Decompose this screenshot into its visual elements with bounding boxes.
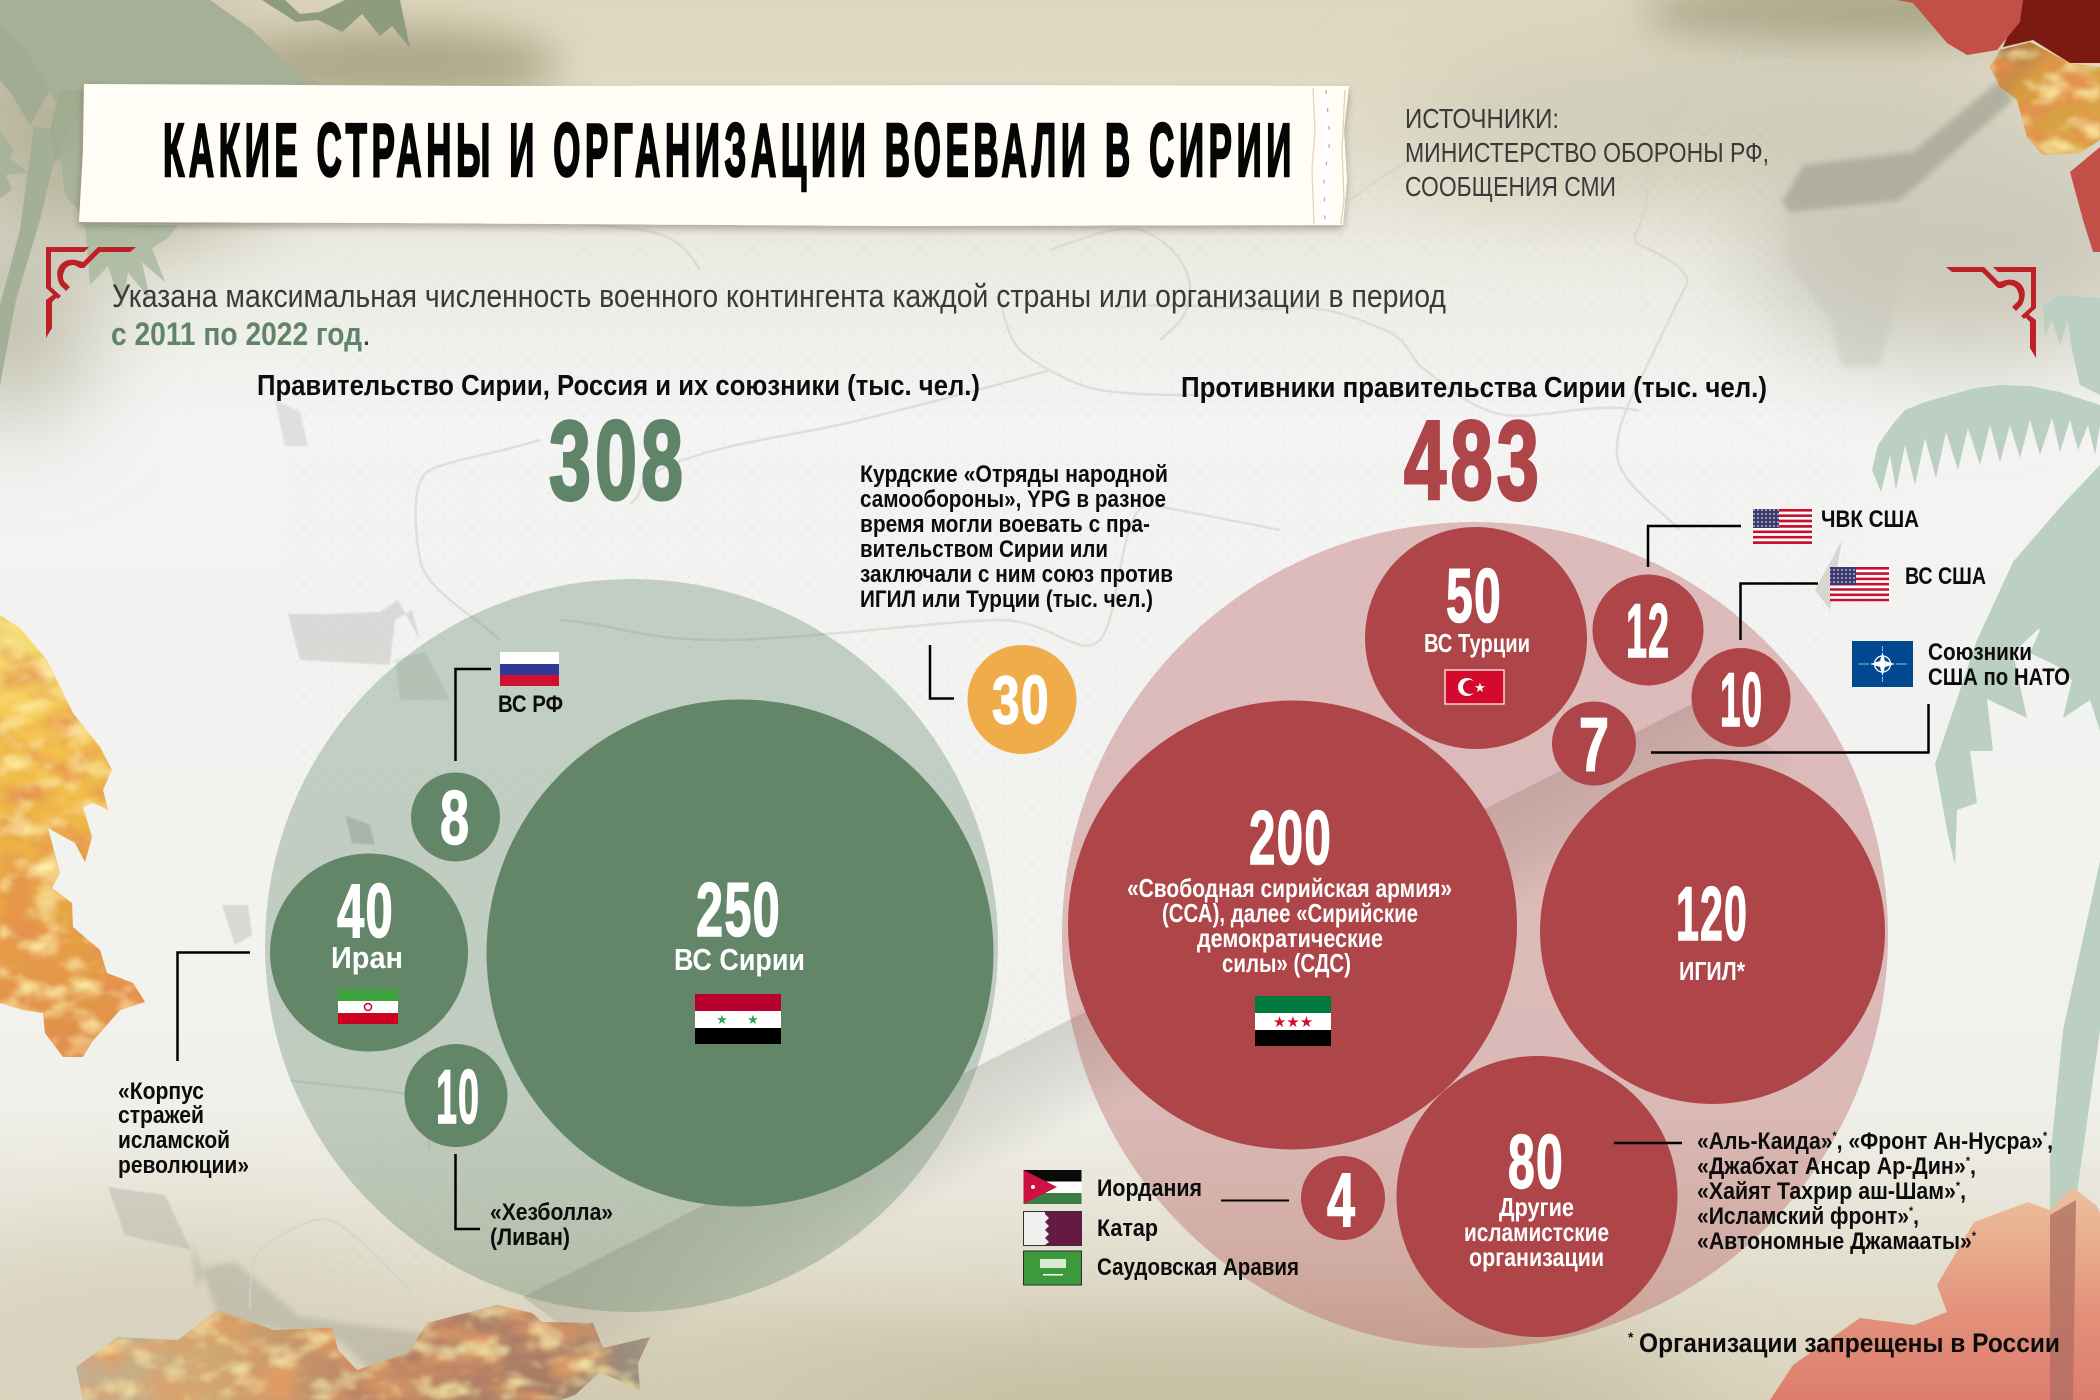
heading: government side: Правительство Сирии, Россия и их союзники (тыс. чел.): [257, 370, 980, 402]
bubble: Russia 8: [411, 772, 500, 862]
legend: Jordan, Qatar, Saudi Arabia: Катар: [1097, 1215, 1158, 1242]
bubble: Turkey 50: [1365, 527, 1587, 749]
sources: МИНИСТЕРСТВО ОБОРОНЫ РФ,: [1405, 137, 1769, 168]
flag: Syrian opposition: [1255, 996, 1331, 1046]
bubble: ISIS 120: 120: [1676, 872, 1748, 957]
callout: Kurdish YPG: ИГИЛ или Турции (тыс. чел.): [860, 586, 1153, 613]
callout: list of Islamist groups: *: [2043, 1129, 2047, 1143]
callout: list of Islamist groups: «Джабхат Ансар Ар-Дин»: [1697, 1153, 1997, 1180]
flag: Iran: [338, 989, 398, 1024]
intro text: .: [362, 316, 371, 352]
callout: list of Islamist groups: *: [1909, 1204, 1913, 1218]
bubble: Kurds 30: [968, 645, 1076, 754]
callout: Hezbollah: «Хезболла»: [490, 1199, 613, 1226]
callout: US contractors: ЧВК США: [1821, 506, 1919, 533]
bubble: Gulf and Jordan 4: [1301, 1156, 1385, 1243]
background: map fragment, bottom right: [1770, 1187, 2100, 1400]
callout: list of Islamist groups: «Исламский фронт»: [1697, 1203, 1938, 1230]
bubble: Iran 40: 40: [337, 869, 394, 954]
bubble: NATO allies 7: [1552, 702, 1636, 788]
legend: Jordan, Qatar, Saudi Arabia: Саудовская Аравия: [1097, 1254, 1299, 1281]
title panel: [79, 84, 1349, 226]
bubble: FSA / SDF 200: демократические: [1197, 923, 1383, 953]
callout: NATO allies: [1651, 639, 2070, 752]
callout: list of Islamist groups: *: [1956, 1179, 1960, 1193]
callout: list of Islamist groups: *: [1833, 1129, 1837, 1143]
bubble: US contractors 12: [1592, 574, 1704, 686]
callout: list of Islamist groups: *: [1966, 1154, 1970, 1168]
flag: Qatar: [1024, 1212, 1082, 1246]
callout: list of Islamist groups: ,: [1913, 1203, 1919, 1230]
callout: Kurdish YPG: [860, 461, 1173, 698]
bubble: other Islamist groups 80: исламистские: [1464, 1217, 1609, 1247]
torn paper edge: [1312, 88, 1345, 224]
bubble: FSA / SDF 200: «Свободная сирийская армия»: [1127, 873, 1452, 903]
bubble: FSA / SDF 200: 200: [1249, 796, 1332, 881]
flag: NATO: [1852, 641, 1913, 687]
footnote: Организации запрещены в России: [1639, 1328, 2060, 1358]
heading: opponents side: Противники правительства Сирии (тыс. чел.): [1181, 372, 1767, 404]
flag: Syrian opposition: ★★★: [1273, 1014, 1313, 1031]
callout: US forces: ВС США: [1905, 563, 1986, 590]
sources: СООБЩЕНИЯ СМИ: [1405, 171, 1616, 202]
bubble: Hezbollah 10: 10: [436, 1055, 480, 1140]
footnote: *: [1628, 1329, 1634, 1345]
bubble: Kurds 30: 30: [992, 662, 1050, 738]
callout: NATO allies: США по НАТО: [1928, 664, 2070, 691]
callout: NATO allies: Союзники: [1928, 639, 2032, 666]
decorative corner, top right: [1946, 267, 2036, 358]
bubble: Syrian army 250: ВС Сирии: [674, 942, 805, 977]
intro text: с 2011 по 2022 год: [111, 316, 362, 352]
bubble: ISIS 120: ИГИЛ*: [1679, 956, 1746, 986]
flag: USA: [1753, 509, 1812, 544]
callout: list of Islamist groups: ,: [1970, 1153, 1976, 1180]
bubble: Gulf and Jordan 4: 4: [1327, 1158, 1355, 1243]
callout: list of Islamist groups: «Хайят Тахрир аш-Шам»: [1697, 1178, 1988, 1205]
callout: IRGC: исламской: [118, 1127, 230, 1154]
callout: list of Islamist groups: ,: [2047, 1128, 2053, 1155]
callout: Hezbollah: (Ливан): [490, 1224, 570, 1251]
bubble: ISIS 120: [1540, 759, 1885, 1104]
bubble: FSA / SDF 200: (ССА), далее «Сирийские: [1162, 898, 1418, 928]
flag: Russia: [500, 652, 559, 686]
legend: Jordan, Qatar, Saudi Arabia: Иордания: [1097, 1175, 1202, 1202]
flag: Turkey: [1445, 670, 1504, 704]
flag: Jordan: [1024, 1170, 1082, 1204]
background: burning map fragment, left: [0, 615, 145, 1057]
intro text: [111, 278, 1446, 352]
flag: USA: [1830, 567, 1889, 601]
total: 483: 483: [1404, 398, 1543, 523]
bubble: US forces 10: [1692, 648, 1790, 747]
bubble: other Islamist groups 80: 80: [1508, 1120, 1564, 1205]
bubble: Hezbollah 10: [404, 1044, 508, 1147]
callout: list of Islamist groups: [1614, 1128, 2053, 1255]
flag: Saudi Arabia: [1024, 1251, 1082, 1285]
callout: list of Islamist groups: , «Фронт Ан-Нусра»: [1837, 1128, 2043, 1155]
background: left palm tree: [0, 0, 410, 385]
flag: Syria: ★: [716, 1012, 728, 1027]
bubble: NATO allies 7: 7: [1579, 703, 1609, 788]
callout: IRGC: стражей: [118, 1102, 204, 1129]
background: burning map fragment, top right: [1897, 0, 2100, 252]
callout: Kurdish YPG: самообороны», YPG в разное: [860, 486, 1166, 513]
bubble: Turkey 50: 50: [1446, 554, 1502, 639]
intro text: Указана максимальная численность военного контингента каждой страны или организации в период: [112, 278, 1446, 314]
flag: Syria: [695, 994, 781, 1044]
callout: Kurdish YPG: вительством Сирии или: [860, 536, 1108, 563]
flag: Syria: ★: [747, 1012, 759, 1027]
bubble: other Islamist groups 80: организации: [1469, 1242, 1604, 1272]
callout: US forces: [1740, 563, 1986, 640]
callout: IRGC: «Корпус: [118, 1078, 204, 1105]
callout: list of Islamist groups: ,: [1960, 1178, 1966, 1205]
legend: Jordan, Qatar, Saudi Arabia: [1024, 1170, 1299, 1285]
bubble: Turkey 50: ВС Турции: [1424, 628, 1530, 658]
palm trunk over the red map fragment: [2050, 1200, 2076, 1400]
bubble: Syrian army 250: [486, 700, 994, 1206]
bubble: US contractors 12: 12: [1626, 589, 1670, 674]
callout: list of Islamist groups: *: [1972, 1229, 1976, 1243]
sources: [1405, 103, 1769, 202]
bubble: Iran 40: Иран: [331, 940, 403, 975]
flag: Turkey: ★: [1474, 680, 1486, 695]
callout: Kurdish YPG: время могли воевать с пра-: [860, 511, 1150, 538]
callout: IRGC: [118, 952, 250, 1179]
bubble: FSA / SDF 200: [1068, 700, 1517, 1150]
decorative corner, top left: [46, 247, 136, 338]
bubble: Russia 8: 8: [440, 776, 469, 861]
background: right palm tree: [1872, 295, 2100, 1400]
pink bubble group: [1062, 522, 1888, 1348]
bubble: Syrian army 250: 250: [696, 868, 781, 953]
bubble: FSA / SDF 200: силы» (СДС): [1222, 948, 1351, 978]
callout: Hezbollah: [456, 1154, 613, 1251]
sources: ИСТОЧНИКИ:: [1405, 103, 1559, 134]
bubble: US forces 10: 10: [1720, 658, 1763, 743]
callout: Kurdish YPG: заключали с ним союз против: [860, 561, 1173, 588]
bubble: Iran 40: [270, 854, 468, 1052]
callout: US contractors: [1648, 506, 1919, 567]
paper strip: [79, 84, 1349, 226]
green bubble group: [265, 579, 998, 1312]
bubble: other Islamist groups 80: [1396, 1056, 1678, 1337]
callout: IRGC: революции»: [118, 1152, 249, 1179]
background: burning map fragment, bottom: [76, 1305, 650, 1400]
callout: list of Islamist groups: «Автономные Джамааты»: [1697, 1228, 2007, 1255]
callout: Kurdish YPG: Курдские «Отряды народной: [860, 461, 1168, 488]
bubble: other Islamist groups 80: Другие: [1499, 1192, 1574, 1222]
callout: Russian forces: ВС РФ: [498, 691, 563, 718]
callout: list of Islamist groups: «Аль-Каида»: [1697, 1128, 1851, 1155]
total: 308: 308: [549, 398, 687, 523]
callout: Russian forces: [456, 652, 563, 761]
